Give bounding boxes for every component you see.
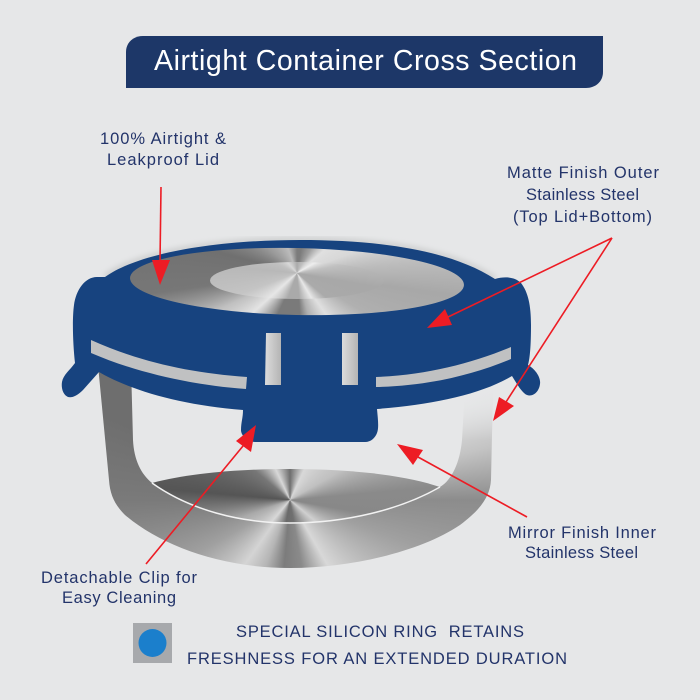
container illustration — [62, 240, 540, 575]
label: mirror finish inner steel — [508, 524, 656, 562]
arrow: to detachable clip — [146, 425, 256, 564]
arrow: to lid outer steel — [427, 238, 612, 328]
blue lid with clips and detachable clip — [62, 240, 540, 442]
label: matte finish outer steel: (Top Lid+Bottom) — [513, 208, 652, 226]
left clip slot — [265, 333, 281, 385]
lid soft shadow — [105, 240, 495, 279]
label: mirror finish inner steel: Stainless Steel — [525, 544, 638, 562]
floor rim highlight — [152, 483, 440, 523]
label: airtight lid: 100% Airtight & — [100, 130, 226, 148]
label: airtight lid: Leakproof Lid — [107, 151, 219, 169]
label: matte finish outer steel: Matte Finish Outer — [507, 164, 660, 182]
lid top steel panel — [130, 248, 464, 316]
arrow: to bottom outer steel — [493, 238, 612, 421]
label: mirror finish inner steel: Mirror Finish Inner — [508, 524, 656, 542]
label: matte finish outer steel: Stainless Steel — [526, 186, 639, 204]
silicon ring note — [187, 623, 567, 668]
title banner: Airtight Container Cross Section — [154, 45, 577, 77]
silicon ring note: SPECIAL SILICON RING RETAINS — [236, 623, 524, 641]
container bowl: mirror finish steel — [98, 372, 492, 568]
arrow: to inner steel — [397, 444, 527, 517]
right clip slot — [342, 333, 358, 385]
right lid band — [376, 347, 511, 387]
label: detachable clip: Detachable Clip for — [41, 569, 198, 587]
left lid band — [91, 340, 247, 389]
label: detachable clip — [41, 569, 198, 607]
label: matte finish outer steel — [507, 164, 660, 226]
label: airtight lid — [100, 130, 226, 169]
container floor disc — [152, 469, 439, 522]
title banner — [126, 36, 603, 88]
label: detachable clip: Easy Cleaning — [62, 589, 176, 607]
lid centre steel disc — [210, 262, 336, 299]
silicon ring note: FRESHNESS FOR AN EXTENDED DURATION — [187, 650, 567, 668]
arrow: to airtight lid — [152, 187, 170, 285]
icon: silicon ring swatch — [133, 623, 172, 663]
